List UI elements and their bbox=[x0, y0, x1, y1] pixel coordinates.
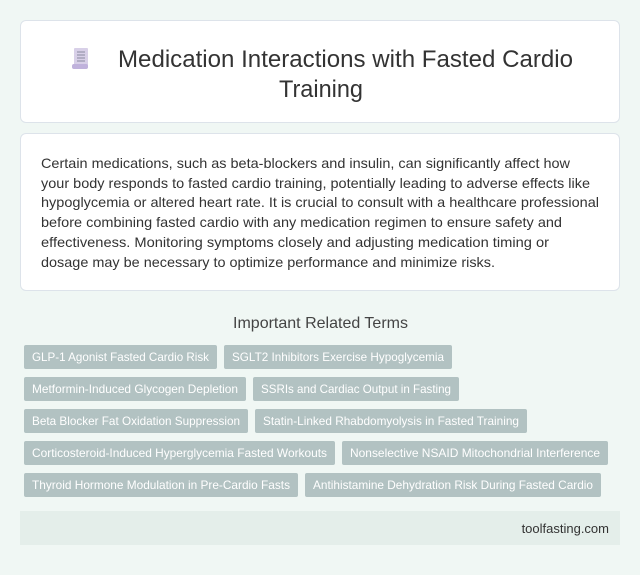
description text bbox=[41, 155, 599, 270]
title: Medication Interactions with Fasted Cardio bbox=[118, 46, 573, 73]
description text: Certain medications, such as beta-blockers and insulin, can significantly affect how bbox=[41, 155, 571, 171]
tags: Beta Blocker Fat Oxidation Suppression bbox=[32, 414, 240, 428]
title bbox=[118, 46, 573, 103]
title: Training bbox=[279, 76, 363, 103]
tags: SSRIs and Cardiac Output in Fasting bbox=[261, 382, 451, 396]
tags: GLP-1 Agonist Fasted Cardio Risk bbox=[32, 350, 210, 364]
tags: SGLT2 Inhibitors Exercise Hypoglycemia bbox=[232, 350, 444, 364]
description text: your body responds to fasted cardio training, potentially leading to adverse effects like bbox=[41, 175, 590, 191]
footer text: toolfasting.com bbox=[522, 521, 609, 536]
description card bbox=[20, 133, 620, 291]
description text: effectiveness. Monitoring symptoms closely and adjusting medication timing or bbox=[41, 234, 549, 250]
section heading: Important Related Terms bbox=[233, 315, 408, 332]
tags: Thyroid Hormone Modulation in Pre-Cardio Fasts bbox=[32, 478, 290, 492]
footer bar bbox=[20, 511, 620, 545]
description text: dosage may be necessary to optimize performance and minimize risks. bbox=[41, 254, 495, 270]
icon: document bbox=[72, 48, 88, 69]
description text: before combining fasted cardio with any medication regimen to ensure safety and bbox=[41, 214, 562, 230]
tags bbox=[24, 345, 608, 497]
tags: Antihistamine Dehydration Risk During Fasted Cardio bbox=[313, 478, 593, 492]
description text: hypoglycemia or altered heart rate. It is crucial to consult with a healthcare professional bbox=[41, 194, 599, 210]
tags: Metformin-Induced Glycogen Depletion bbox=[32, 382, 238, 396]
tags: Corticosteroid-Induced Hyperglycemia Fasted Workouts bbox=[32, 446, 327, 460]
tags: Nonselective NSAID Mitochondrial Interference bbox=[350, 446, 600, 460]
tags: Statin-Linked Rhabdomyolysis in Fasted Training bbox=[263, 414, 519, 428]
header card bbox=[20, 20, 620, 123]
